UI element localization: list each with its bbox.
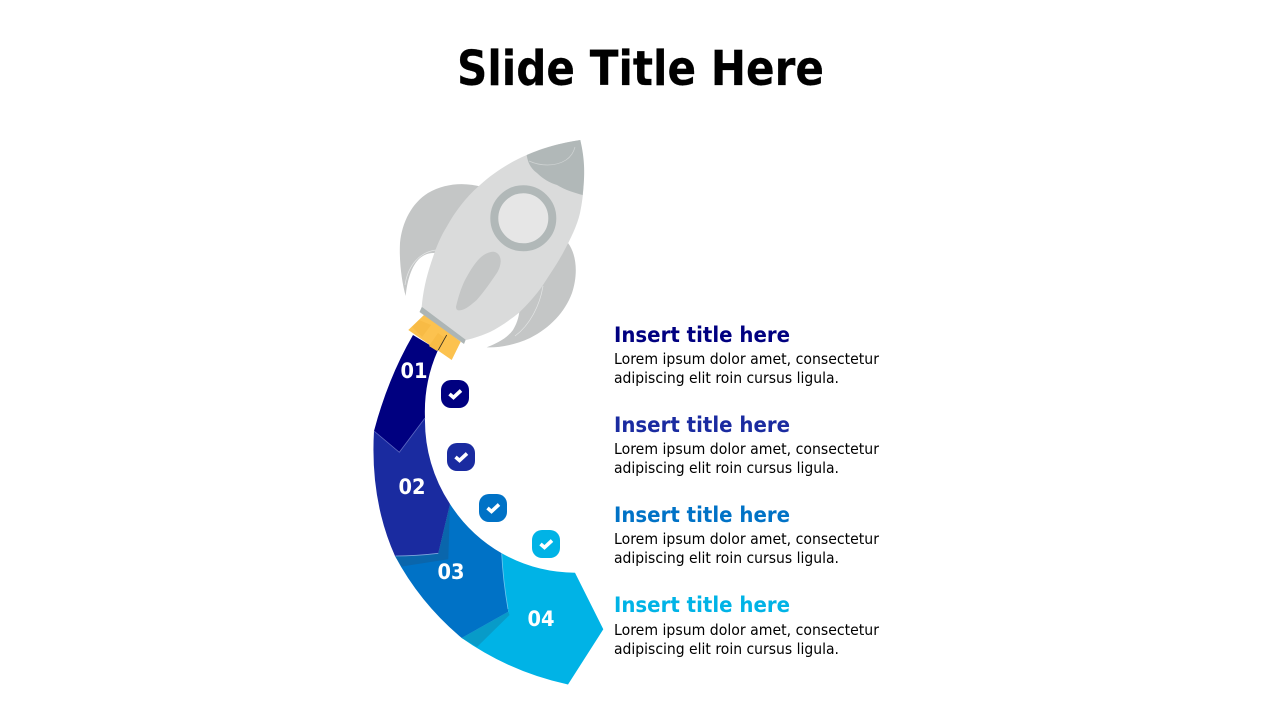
text block 01 [614,323,880,387]
text block 04: Insert title here [614,593,790,617]
segment 04 shadow [462,612,510,647]
text block 01: Insert title here [614,323,790,347]
rocket nose cone [527,140,584,195]
text block 03: adipiscing elit roin cursus ligula. [614,549,839,567]
icon: rocket [400,140,584,360]
rocket nozzle [408,314,461,360]
rocket window [494,189,552,247]
text block 01: adipiscing elit roin cursus ligula. [614,369,839,387]
text block 02: Insert title here [614,413,790,437]
segment 02 [373,418,450,556]
text block 03 [614,503,880,567]
text block 03: Lorem ipsum dolor amet, consectetur [614,530,880,548]
text block 02: Lorem ipsum dolor amet, consectetur [614,440,880,458]
segment 01 [374,335,438,452]
segment 04 [462,553,603,684]
curved segmented band [373,335,603,684]
number 04: 04 [528,607,554,631]
check icon 03 [479,494,507,522]
text block 04: adipiscing elit roin cursus ligula. [614,640,839,658]
title: Slide Title Here [457,41,824,97]
check icon 01 [441,380,469,408]
text block 02 [614,413,880,477]
text block 04: Lorem ipsum dolor amet, consectetur [614,621,880,639]
number 02: 02 [398,475,426,499]
text block 01: Lorem ipsum dolor amet, consectetur [614,350,880,368]
rocket body [422,140,584,340]
check icon 02 [447,443,475,471]
text block 04 [614,593,880,658]
number 01: 01 [400,359,428,383]
number 03: 03 [438,560,464,584]
rocket collar [420,306,466,344]
text block 03: Insert title here [614,503,790,527]
rocket slot [456,252,501,310]
segment 03 shadow [395,504,450,566]
rocket right fin [487,243,576,347]
rocket left fin [400,184,482,296]
text block 02: adipiscing elit roin cursus ligula. [614,459,839,477]
segment 03 [395,504,508,638]
check icon 04 [532,530,560,558]
